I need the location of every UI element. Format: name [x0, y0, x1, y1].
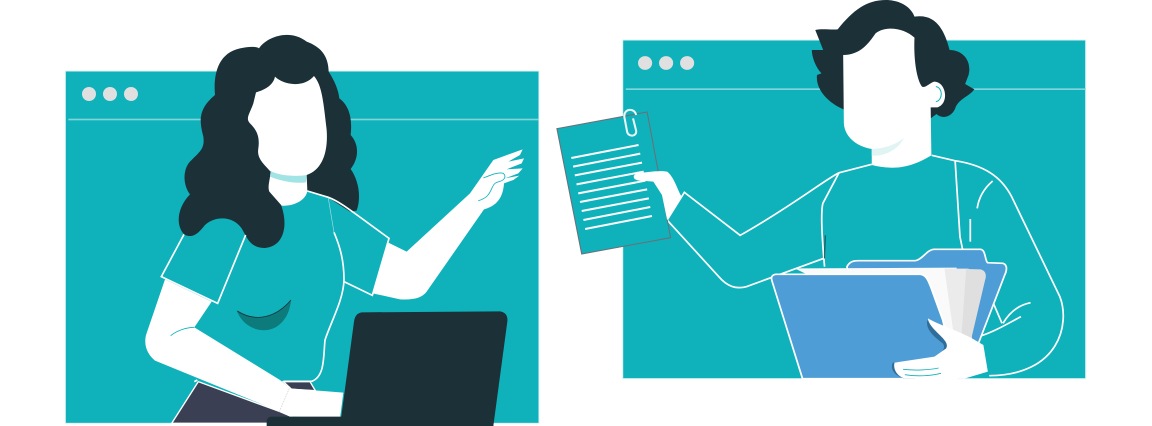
paper clip — [624, 110, 636, 136]
finger lines — [903, 368, 941, 376]
hair — [812, 0, 974, 118]
window header line — [626, 88, 1086, 90]
back folder — [847, 249, 1006, 347]
ear detail — [936, 87, 941, 102]
shirt seam — [328, 198, 334, 232]
neck shadow — [270, 171, 307, 183]
window header line — [68, 119, 538, 120]
panel: man with folders and document — [557, 0, 1086, 379]
document text lines — [571, 145, 652, 229]
document — [557, 110, 671, 254]
window control dots — [638, 56, 694, 70]
document sheet — [557, 112, 671, 254]
laptop base — [267, 417, 493, 426]
browser window background — [623, 40, 1086, 379]
raised arm and hand — [373, 149, 524, 299]
laptop — [340, 311, 507, 426]
shirt outline — [161, 191, 389, 382]
hand holding document — [634, 171, 682, 220]
shirt fold shadow — [237, 300, 291, 330]
elbow and wrist lines — [171, 327, 194, 336]
sweater dark seam — [823, 235, 827, 258]
front folder — [772, 274, 957, 379]
panel: woman with laptop — [65, 35, 539, 426]
face, ear and neck — [843, 29, 945, 168]
sweater outline — [667, 155, 1063, 376]
pants — [172, 382, 315, 423]
hair — [179, 35, 359, 248]
hand detail lines — [478, 173, 505, 201]
window control dots — [82, 87, 138, 101]
hand shadow — [892, 320, 950, 379]
hand holding folder — [894, 318, 988, 379]
neck shadow — [872, 138, 904, 156]
face and neck — [248, 76, 327, 206]
bent arm — [145, 279, 343, 418]
browser window background — [65, 71, 539, 423]
shirt fold line — [237, 300, 291, 317]
folder papers — [795, 268, 986, 340]
